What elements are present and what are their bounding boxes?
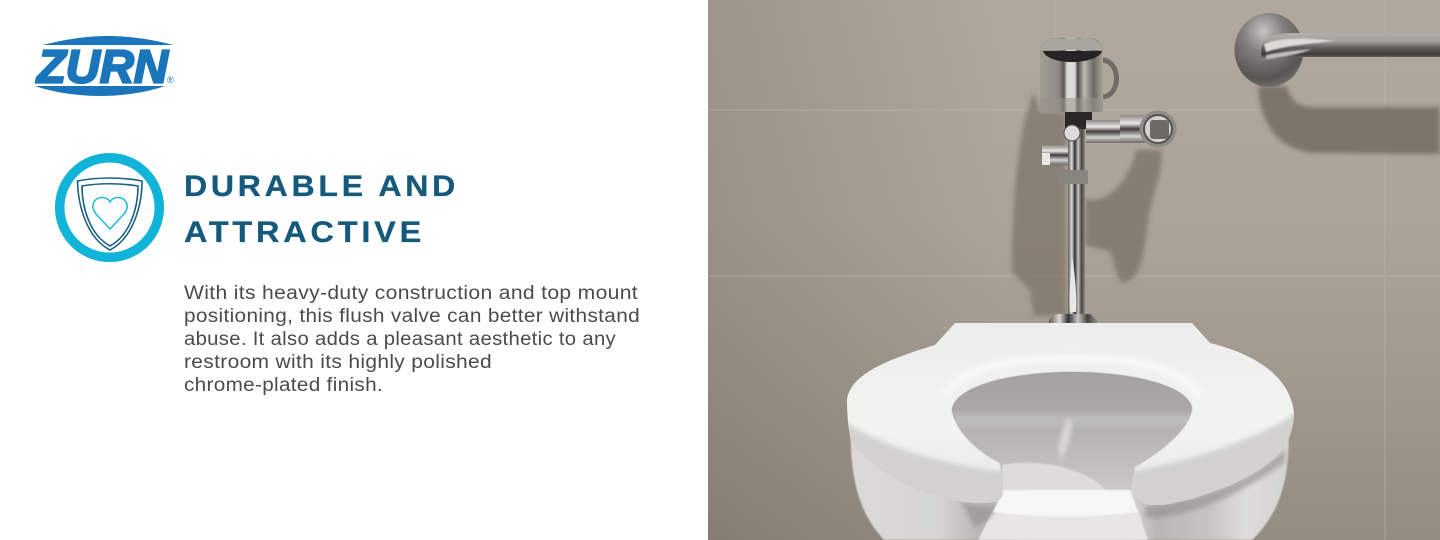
flush valve bbox=[1040, 38, 1176, 330]
heading: ATTRACTIVE bbox=[184, 216, 425, 249]
body text: positioning, this flush valve can better withstand bbox=[184, 306, 640, 327]
nut bbox=[1064, 125, 1080, 141]
sensor top dome bbox=[1041, 38, 1102, 50]
water highlight bbox=[1002, 463, 1106, 490]
neck bbox=[1065, 112, 1092, 129]
bowl interior bbox=[952, 372, 1192, 490]
body text: chrome-plated finish. bbox=[184, 375, 383, 396]
sensor body bbox=[1040, 38, 1103, 112]
bowl reflection bbox=[1059, 418, 1071, 458]
seat front edge shading bbox=[848, 412, 1294, 505]
body text: With its heavy-duty construction and top mount bbox=[184, 283, 638, 304]
side stub bbox=[1042, 145, 1068, 165]
front rim bbox=[993, 490, 1138, 516]
toilet bbox=[840, 320, 1300, 540]
sensor handle behind bbox=[1103, 60, 1116, 97]
sensor lower band bbox=[1040, 98, 1103, 112]
valve arm bbox=[1086, 120, 1146, 143]
logo: Zurn: ZURN bbox=[35, 40, 169, 92]
logo: Zurn: ® bbox=[167, 75, 174, 85]
toilet seat bbox=[840, 320, 1300, 510]
photo: restroom wall with flush valve and toilet bbox=[708, 0, 1440, 540]
shadows on wall bbox=[1012, 86, 1440, 316]
grab bar bbox=[1234, 13, 1440, 87]
valve pipe bbox=[1068, 112, 1085, 315]
body text bbox=[184, 283, 640, 396]
heading bbox=[184, 170, 459, 249]
tiled wall bbox=[708, 0, 1440, 540]
lower pipe highlight bbox=[1070, 255, 1076, 312]
seat inner ridge bbox=[945, 358, 1200, 398]
stub end bbox=[1042, 153, 1050, 165]
sensor window bbox=[1043, 51, 1102, 62]
base flange bbox=[1049, 314, 1097, 330]
heading: DURABLE AND bbox=[184, 170, 459, 203]
bowl front lower bbox=[978, 510, 1148, 540]
collar bbox=[1057, 170, 1088, 184]
icon: shield with heart in ring bbox=[60, 158, 159, 257]
coupling bbox=[1120, 115, 1144, 143]
body text: restroom with its highly polished bbox=[184, 352, 492, 373]
bowl exterior bbox=[851, 420, 1289, 540]
left white panel bbox=[0, 0, 708, 540]
body text: abuse. It also adds a pleasant aesthetic to any bbox=[184, 329, 616, 350]
stop valve bbox=[1140, 110, 1176, 148]
shadow under seat bbox=[960, 450, 1285, 528]
